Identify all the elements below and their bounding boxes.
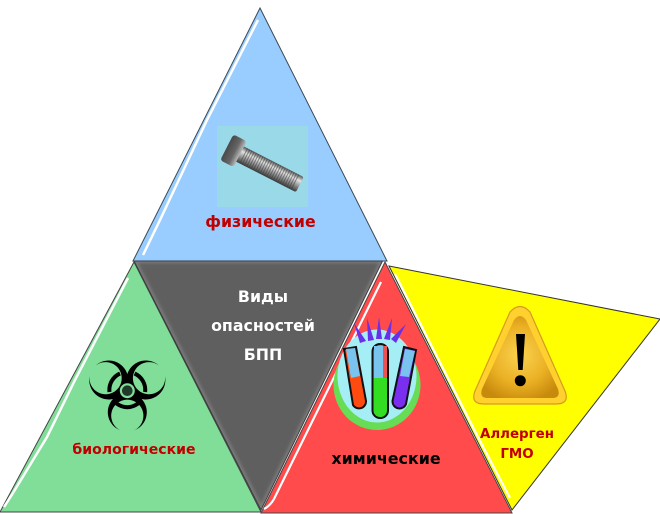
panel: biological hazards [0,262,261,512]
label: allergen [480,427,554,462]
panel: chemical hazards [261,262,512,513]
label: allergen: ГМО [500,447,534,462]
label: allergen: Аллерген [480,427,554,442]
exclamation mark [515,334,526,386]
panel: types of hazards centre [134,261,382,510]
label: physical: физические [205,212,316,231]
panel: allergen GMO [389,266,660,510]
icon: warning triangle [474,306,566,404]
icon: test tubes [334,317,420,430]
icon: bolt [217,126,308,207]
label: chemical: химические [331,449,441,468]
heading: centre text [211,287,315,364]
icon: biohazard [83,354,172,431]
panel: physical hazards [133,8,387,261]
label: biological: биологические [72,442,196,458]
heading: centre text: БПП [244,345,282,364]
heading: centre text: опасностей [211,316,315,335]
heading: centre text: Виды [238,287,288,306]
